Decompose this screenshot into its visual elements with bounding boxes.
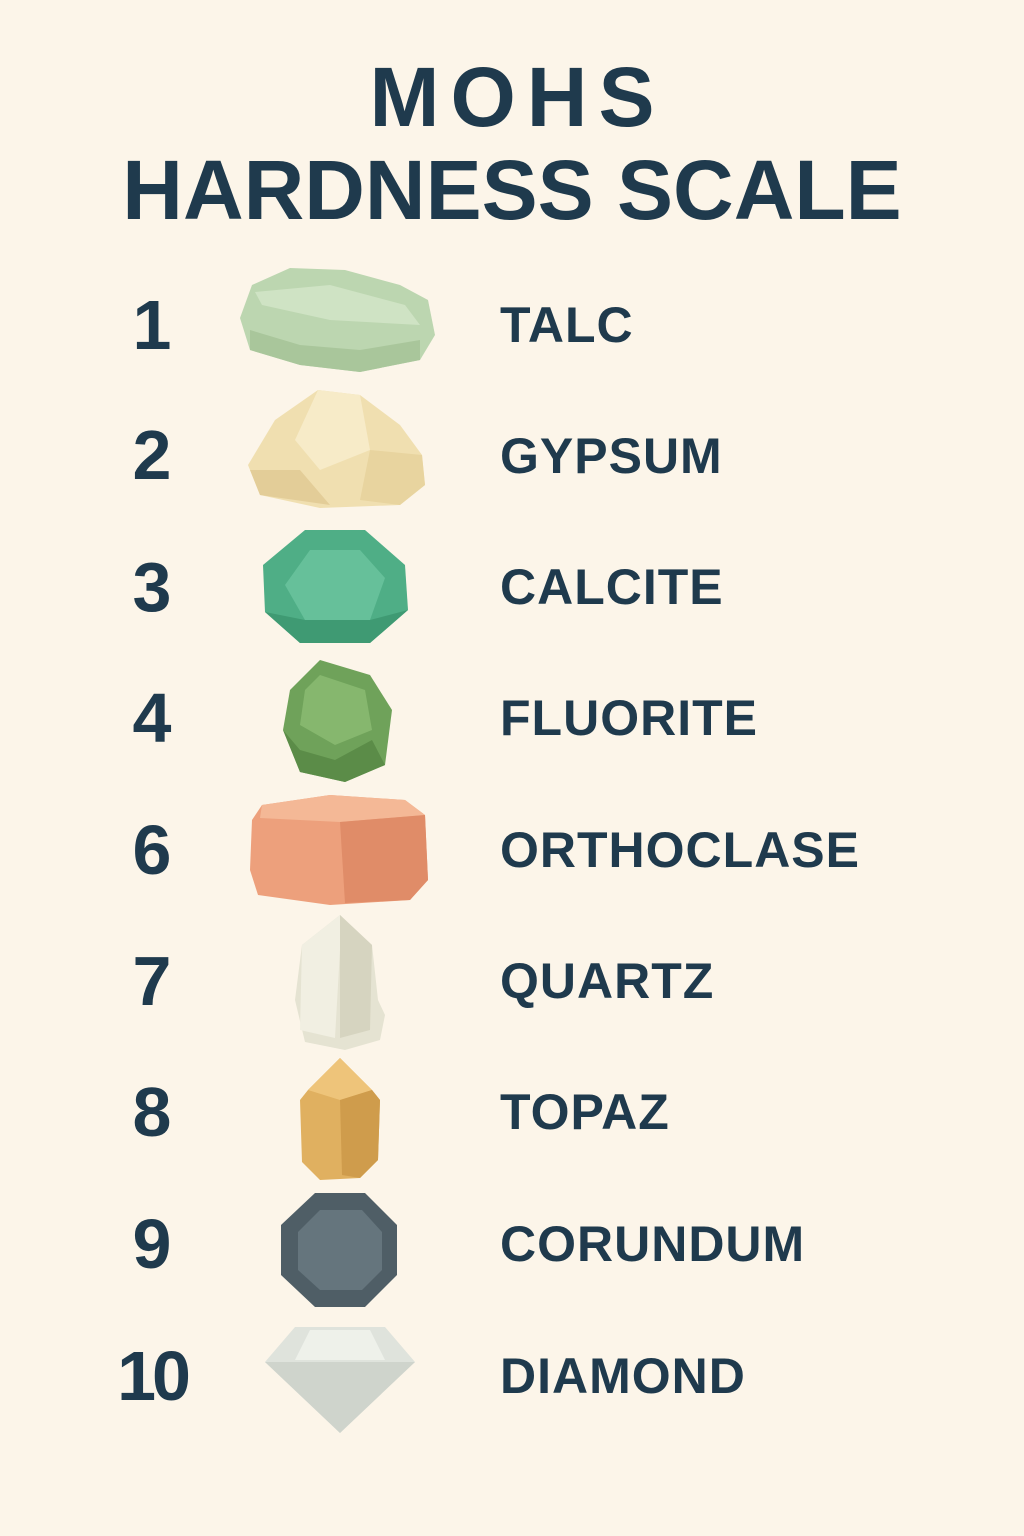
row numbers: 3	[133, 548, 171, 626]
mineral names: FLUORITE	[500, 690, 758, 746]
row numbers: 7	[133, 942, 171, 1020]
mineral names: QUARTZ	[500, 953, 714, 1009]
icon: corundum	[281, 1193, 397, 1307]
row numbers: 4	[133, 679, 171, 757]
icon: fluorite	[283, 660, 392, 782]
mineral names: TOPAZ	[500, 1084, 670, 1140]
row numbers	[117, 286, 188, 1415]
icon: quartz	[295, 915, 385, 1050]
row numbers: 9	[133, 1205, 171, 1283]
title	[122, 50, 902, 237]
mineral names	[500, 297, 860, 1404]
mineral names: DIAMOND	[500, 1348, 746, 1404]
icon: topaz	[300, 1058, 380, 1180]
icon: calcite	[263, 530, 408, 643]
icon: talc	[240, 268, 435, 372]
icon: diamond	[265, 1327, 415, 1433]
mineral names: CALCITE	[500, 559, 724, 615]
icon: gypsum	[248, 390, 425, 508]
mineral names: ORTHOCLASE	[500, 822, 860, 878]
title: MOHS	[370, 50, 666, 144]
row numbers: 10	[117, 1337, 187, 1415]
title: HARDNESS SCALE	[122, 143, 902, 237]
row numbers: 6	[133, 811, 171, 889]
row numbers: 8	[133, 1073, 171, 1151]
icon: orthoclase	[250, 795, 428, 905]
mineral names: CORUNDUM	[500, 1216, 805, 1272]
row numbers: 1	[133, 286, 171, 364]
row numbers: 2	[133, 416, 171, 494]
mineral names: GYPSUM	[500, 428, 723, 484]
mineral names: TALC	[500, 297, 634, 353]
